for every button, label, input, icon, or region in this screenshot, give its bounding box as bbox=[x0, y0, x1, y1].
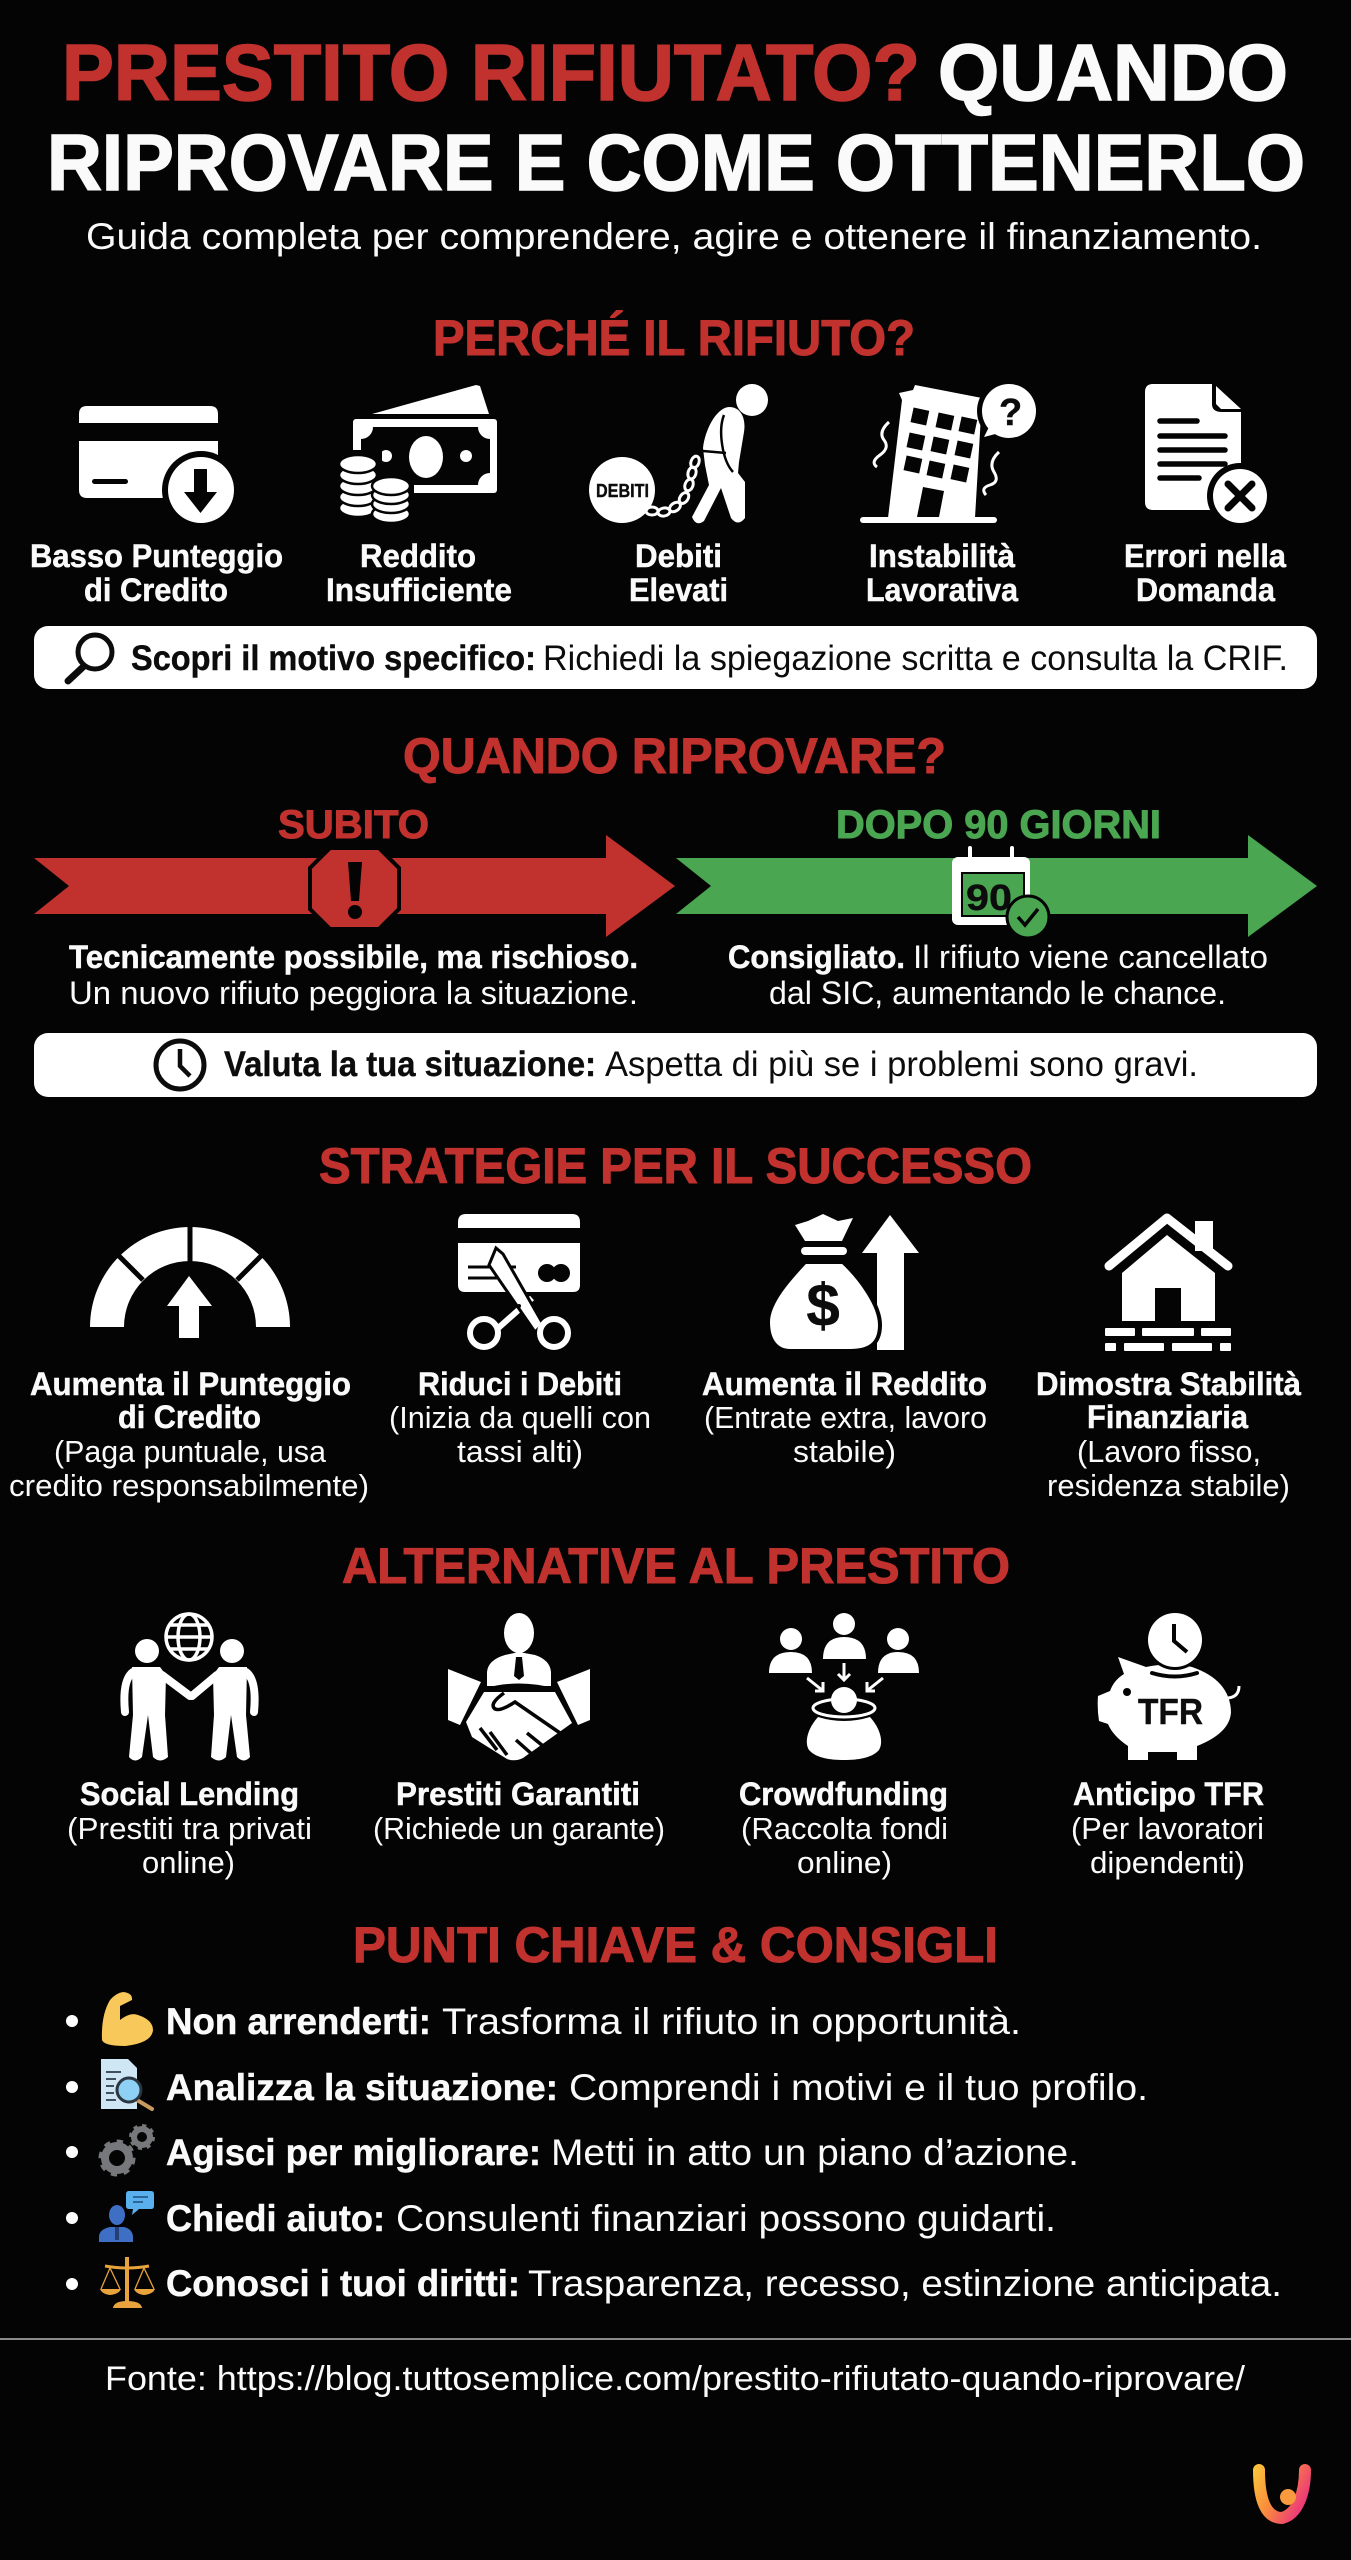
point: chiedi aiuto: Chiedi aiuto: bbox=[166, 2198, 385, 2239]
text: dopo 90 giorni description: Il rifiuto viene cancellato bbox=[913, 939, 1268, 975]
point: analizza la situazione bbox=[66, 2059, 1148, 2109]
label: reddito insufficiente: Insufficiente bbox=[326, 572, 512, 608]
text: riduci i debiti: tassi alti) bbox=[457, 1434, 583, 1469]
heading: strategie: STRATEGIE PER IL SUCCESSO bbox=[319, 1138, 1032, 1194]
text: social lending: Social Lending bbox=[80, 1776, 299, 1812]
point: non arrenderti: Trasforma il rifiuto in opportunità. bbox=[442, 2001, 1021, 2042]
heading: perché il rifiuto: PERCHÉ IL RIFIUTO? bbox=[433, 310, 915, 366]
point: agisci per migliorare: Metti in atto un piano d’azione. bbox=[551, 2132, 1079, 2173]
icon: magnifier bbox=[68, 635, 112, 681]
icon: leaning building with question bubble: ? bbox=[999, 392, 1022, 434]
point: conosci i tuoi diritti: Trasparenza, recesso, estinzione anticipata. bbox=[528, 2263, 1282, 2304]
text: aumenta il punteggio: di Credito bbox=[118, 1399, 261, 1435]
text: anticipo TFR bbox=[1071, 1776, 1264, 1880]
heading: quando riprovare: QUANDO RIPROVARE? bbox=[403, 728, 946, 784]
label: debiti elevati: Elevati bbox=[629, 572, 728, 608]
text: dopo 90 giorni description bbox=[728, 939, 1268, 1011]
text: crowdfunding: online) bbox=[797, 1845, 892, 1880]
text: dimostra stabilità: residenza stabile) bbox=[1047, 1468, 1290, 1503]
label: basso punteggio bbox=[30, 538, 283, 608]
callout: valuta la tua situazione bbox=[34, 1033, 1317, 1097]
panel: key points bbox=[66, 1992, 1282, 2308]
text: dimostra stabilità bbox=[1036, 1366, 1301, 1503]
text: anticipo TFR: (Per lavoratori bbox=[1071, 1811, 1264, 1846]
icon: calendar 90 days bbox=[952, 848, 1049, 938]
text: prestiti garantiti: Prestiti Garantiti bbox=[396, 1776, 640, 1812]
label: errori nella domanda bbox=[1124, 538, 1286, 608]
text: aumenta il punteggio: Aumenta il Punteggio bbox=[30, 1366, 351, 1402]
label: instabilità lavorativa: Instabilità bbox=[869, 538, 1015, 574]
text: subito description: Un nuovo rifiuto peggiora la situazione. bbox=[69, 975, 638, 1011]
label: instabilità lavorativa: Lavorativa bbox=[866, 572, 1018, 608]
icon: credit score gauge bbox=[90, 1226, 290, 1338]
heading: alternative: ALTERNATIVE AL PRESTITO bbox=[342, 1538, 1010, 1594]
text: dopo 90 giorni description: dal SIC, aumentando le chance. bbox=[769, 975, 1226, 1011]
heading: punti chiave: PUNTI CHIAVE & CONSIGLI bbox=[353, 1917, 998, 1973]
panel: timeline bbox=[34, 803, 1317, 1011]
icon: piggy bank TFR bbox=[1098, 1610, 1239, 1760]
panel: strategies bbox=[9, 1214, 1301, 1503]
icon: guarantor handshake bbox=[448, 1613, 590, 1760]
label: debiti elevati: Debiti bbox=[635, 538, 722, 574]
text: anticipo TFR: dipendenti) bbox=[1090, 1845, 1245, 1880]
point: agisci per migliorare: Agisci per migliorare: bbox=[166, 2132, 541, 2173]
title bbox=[47, 28, 1305, 207]
text: social lending: online) bbox=[142, 1845, 235, 1880]
text: subito description: Tecnicamente possibile, ma rischioso. bbox=[69, 939, 638, 975]
title: PRESTITO RIFIUTATO? bbox=[62, 28, 920, 117]
text: aumenta il punteggio: credito responsabilmente) bbox=[9, 1468, 369, 1503]
label: reddito insufficiente: Reddito bbox=[360, 538, 476, 574]
point: chiedi aiuto bbox=[66, 2191, 1056, 2242]
icon: person chained to debt ball: DEBITI bbox=[596, 481, 649, 501]
panel: causes bbox=[30, 379, 1286, 608]
text: dopo 90 giorni description: Consigliato. bbox=[728, 939, 905, 975]
callout: scopri il motivo bbox=[34, 626, 1317, 689]
label: errori nella domanda: Domanda bbox=[1136, 572, 1275, 608]
text: riduci i debiti bbox=[389, 1366, 651, 1469]
point: chiedi aiuto: Consulenti finanziari possono guidarti. bbox=[396, 2198, 1056, 2239]
icon: person chained to debt ball bbox=[589, 384, 768, 523]
title: RIPROVARE E COME OTTENERLO bbox=[47, 118, 1305, 207]
point: conosci i tuoi diritti: Conosci i tuoi diritti: bbox=[166, 2263, 520, 2304]
point: analizza la situazione: Comprendi i motivi e il tuo profilo. bbox=[569, 2067, 1148, 2108]
icon: piggy bank TFR: TFR bbox=[1138, 1691, 1203, 1732]
callout: valuta la tua situazione: Aspetta di più se i problemi sono gravi. bbox=[605, 1045, 1198, 1084]
text: aumenta il punteggio bbox=[9, 1366, 369, 1503]
text: riduci i debiti: (Inizia da quelli con bbox=[389, 1400, 651, 1435]
icon: leaning building with question bubble bbox=[860, 379, 1041, 523]
label: basso punteggio: Basso Punteggio bbox=[30, 538, 283, 574]
text: prestiti garantiti: (Richiede un garante) bbox=[373, 1811, 665, 1846]
label: instabilità lavorativa bbox=[866, 538, 1018, 608]
icon: calendar 90 days: 90 bbox=[966, 877, 1012, 918]
icon: clock bbox=[156, 1041, 204, 1089]
point: analizza la situazione: Analizza la situazione: bbox=[166, 2067, 558, 2108]
text: aumenta il punteggio: (Paga puntuale, usa bbox=[54, 1434, 327, 1469]
text: crowdfunding bbox=[739, 1776, 948, 1880]
label: basso punteggio: di Credito bbox=[84, 572, 228, 608]
point: conosci i tuoi diritti bbox=[66, 2257, 1282, 2308]
callout: scopri il motivo: Richiedi la spiegazione scritta e consulta la CRIF. bbox=[543, 639, 1288, 678]
text: aumenta il reddito: stabile) bbox=[793, 1434, 896, 1469]
text: aumenta il reddito bbox=[702, 1366, 987, 1469]
label: errori nella domanda: Errori nella bbox=[1124, 538, 1286, 574]
subtitle: Guida completa per comprendere, agire e ottenere il finanziamento. bbox=[86, 216, 1262, 257]
icon: money bag with rising arrow bbox=[768, 1214, 919, 1351]
text: social lending bbox=[67, 1776, 312, 1880]
label: subito: SUBITO bbox=[278, 803, 429, 847]
icon: crowdfunding bbox=[769, 1613, 919, 1760]
logo bbox=[1259, 2470, 1305, 2518]
text: anticipo TFR: Anticipo TFR bbox=[1073, 1776, 1264, 1812]
icon: house on bricks bbox=[1105, 1218, 1231, 1351]
text: subito description bbox=[69, 939, 638, 1011]
text: crowdfunding: Crowdfunding bbox=[739, 1776, 948, 1812]
panel: alternatives bbox=[67, 1610, 1264, 1880]
text: dimostra stabilità: (Lavoro fisso, bbox=[1077, 1434, 1261, 1469]
text: aumenta il reddito: (Entrate extra, lavoro bbox=[704, 1400, 987, 1435]
point: non arrenderti bbox=[66, 1992, 1021, 2046]
icon: credit card with down arrow bbox=[79, 406, 240, 529]
icon: document with error mark bbox=[1145, 384, 1273, 529]
label: reddito insufficiente bbox=[326, 538, 512, 608]
icon: cash and coins bbox=[332, 385, 497, 530]
source line: Fonte: https://blog.tuttosemplice.com/prestito-rifiutato-quando-riprovare/ bbox=[105, 2360, 1246, 2398]
icon: card and scissors bbox=[458, 1214, 580, 1347]
text: aumenta il reddito: Aumenta il Reddito bbox=[702, 1366, 987, 1402]
text: riduci i debiti: Riduci i Debiti bbox=[418, 1366, 622, 1402]
text: prestiti garantiti bbox=[373, 1776, 665, 1846]
icon: money bag with rising arrow: $ bbox=[806, 1272, 840, 1339]
callout: valuta la tua situazione: Valuta la tua situazione: bbox=[224, 1045, 596, 1084]
icon: social lending people and globe bbox=[124, 1614, 255, 1760]
text: crowdfunding: (Raccolta fondi bbox=[741, 1811, 948, 1846]
label: dopo 90 giorni: DOPO 90 GIORNI bbox=[836, 803, 1161, 847]
text: dimostra stabilità: Finanziaria bbox=[1087, 1399, 1248, 1435]
callout: scopri il motivo: Scopri il motivo specifico: bbox=[131, 639, 536, 678]
arrow: red bbox=[34, 835, 675, 937]
point: non arrenderti: Non arrenderti: bbox=[166, 2001, 431, 2042]
text: dimostra stabilità: Dimostra Stabilità bbox=[1036, 1366, 1301, 1402]
point: agisci per migliorare bbox=[66, 2126, 1079, 2174]
title: QUANDO bbox=[938, 28, 1288, 117]
arrow: green bbox=[676, 835, 1317, 937]
text: social lending: (Prestiti tra privati bbox=[67, 1811, 312, 1846]
icon: stop warning bbox=[310, 848, 399, 929]
label: debiti elevati bbox=[629, 538, 728, 608]
